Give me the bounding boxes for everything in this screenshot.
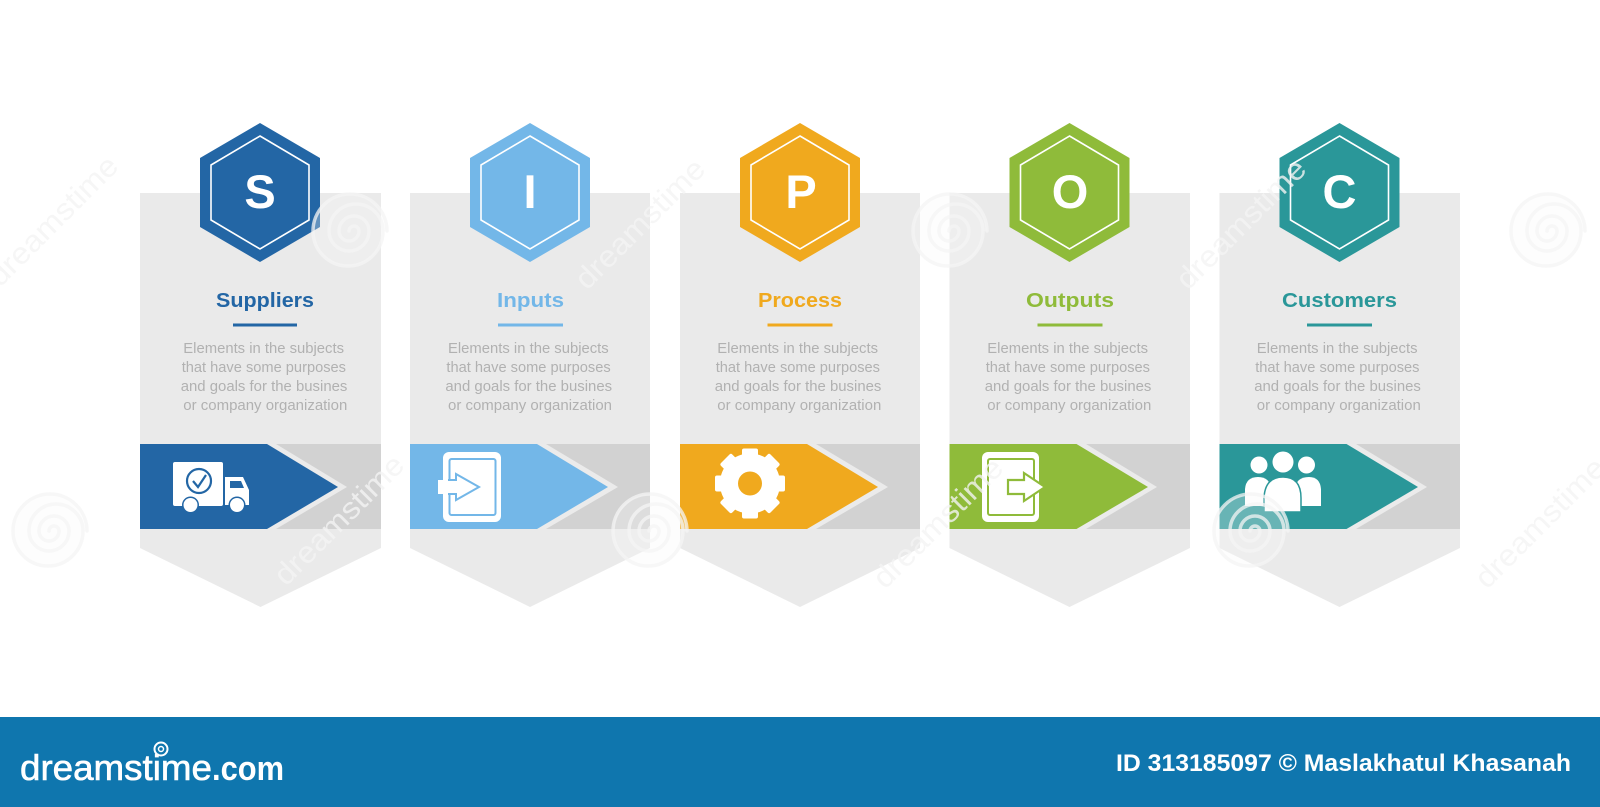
description: that have some purposes — [716, 359, 880, 376]
card background — [140, 193, 381, 607]
footer logo: .com — [212, 750, 284, 788]
icon: people — [1245, 452, 1321, 512]
letter: P — [785, 165, 817, 218]
description: Elements in the subjects — [183, 340, 344, 357]
description — [715, 340, 881, 414]
icon: output door — [982, 452, 1045, 522]
watermark overlay: dreamstime — [1170, 152, 1313, 296]
description: and goals for the busines — [181, 378, 347, 395]
heading: Customers — [1282, 290, 1397, 312]
icon: gear — [715, 448, 785, 518]
arrow — [950, 444, 1148, 529]
description: or company organization — [987, 397, 1151, 414]
footer credit: ID 313185097 © Maslakhatul Khasanah — [1116, 750, 1571, 777]
description: or company organization — [448, 397, 612, 414]
heading: Outputs — [1026, 290, 1114, 312]
heading: Suppliers — [216, 290, 314, 312]
panel: inputs — [410, 123, 650, 607]
card background — [410, 193, 650, 607]
arrow outline — [537, 444, 618, 529]
panel: process — [680, 123, 920, 607]
arrow — [680, 444, 878, 529]
heading underline — [1307, 324, 1372, 326]
heading underline — [233, 324, 297, 326]
description: that have some purposes — [986, 359, 1150, 376]
letter: O — [1052, 165, 1088, 218]
hexagon inner outline — [1290, 136, 1388, 249]
description: that have some purposes — [182, 359, 346, 376]
description: and goals for the busines — [985, 378, 1151, 395]
heading underline — [498, 324, 563, 326]
grey band — [815, 444, 920, 529]
arrow outline — [807, 444, 888, 529]
letter: C — [1323, 165, 1356, 218]
description: Elements in the subjects — [987, 340, 1148, 357]
footer logo — [20, 742, 284, 788]
grey band — [1084, 444, 1190, 529]
description: and goals for the busines — [445, 378, 612, 395]
hexagon badge — [1280, 123, 1400, 262]
description: that have some purposes — [446, 359, 611, 376]
hexagon inner outline — [481, 136, 579, 249]
hexagon badge — [740, 123, 860, 262]
arrow — [140, 444, 338, 529]
arrow — [410, 444, 608, 529]
description — [985, 340, 1151, 414]
grey band — [545, 444, 650, 529]
description: Elements in the subjects — [448, 340, 609, 357]
watermark overlay: dreamstime — [1469, 451, 1600, 595]
hexagon inner outline — [1020, 136, 1118, 249]
icon: input door — [438, 452, 501, 522]
description: or company organization — [183, 397, 347, 414]
hexagon inner outline — [211, 136, 309, 249]
heading underline — [768, 324, 832, 326]
hexagon badge — [470, 123, 590, 262]
arrow outline — [1076, 444, 1157, 529]
description — [445, 340, 612, 414]
heading: Inputs — [497, 290, 564, 312]
letter: S — [244, 165, 276, 218]
heading underline — [1038, 324, 1102, 326]
hexagon inner outline — [751, 136, 849, 249]
watermark overlay: dreamstime — [268, 448, 411, 592]
card background — [1220, 193, 1460, 607]
arrow — [1220, 444, 1418, 529]
description: Elements in the subjects — [1257, 340, 1418, 357]
panel: outputs — [950, 123, 1190, 607]
heading: Process — [758, 290, 842, 312]
arrow outline — [267, 444, 347, 529]
grey band — [275, 444, 381, 529]
card background — [680, 193, 920, 607]
footer logo: dreamstime — [20, 747, 212, 788]
card background — [950, 193, 1190, 607]
description: and goals for the busines — [1254, 378, 1421, 395]
icon: truck — [173, 462, 249, 514]
grey band — [1354, 444, 1460, 529]
watermark overlay: dreamstime — [867, 451, 1010, 595]
description: that have some purposes — [1255, 359, 1420, 376]
description: and goals for the busines — [715, 378, 881, 395]
panel: customers — [1220, 123, 1460, 607]
description: or company organization — [1257, 397, 1421, 414]
watermark overlay: dreamstime — [569, 152, 712, 296]
description — [181, 340, 347, 414]
panel: suppliers — [140, 123, 381, 607]
description: Elements in the subjects — [717, 340, 878, 357]
description: or company organization — [717, 397, 881, 414]
letter: I — [523, 165, 537, 218]
footer bar — [0, 717, 1600, 807]
hexagon badge — [1010, 123, 1130, 262]
arrow outline — [1346, 444, 1427, 529]
watermark overlay — [0, 149, 1600, 595]
description — [1254, 340, 1421, 414]
hexagon badge — [200, 123, 320, 262]
